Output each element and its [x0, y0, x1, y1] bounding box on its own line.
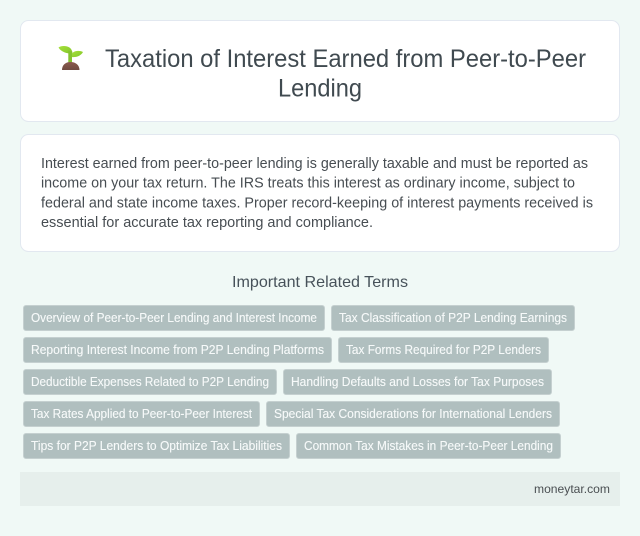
tag: Special Tax Considerations for International Lenders	[274, 407, 552, 421]
tag: Common Tax Mistakes in Peer-to-Peer Lending	[304, 439, 553, 453]
panel: title card	[20, 20, 620, 122]
tag: Reporting Interest Income from P2P Lending Platforms	[31, 343, 324, 357]
tag	[24, 306, 324, 330]
text block: description: Interest earned from peer-to-peer lending is generally taxable and must be reported as	[41, 156, 588, 172]
tag	[296, 434, 560, 458]
tag	[266, 402, 560, 426]
tag: Deductible Expenses Related to P2P Lending	[31, 375, 269, 389]
tag	[24, 338, 332, 362]
tag: Tax Classification of P2P Lending Earnings	[339, 311, 567, 325]
tag	[284, 370, 552, 394]
title: Lending	[278, 74, 362, 102]
tag	[338, 338, 548, 362]
heading: related terms: Important Related Terms	[232, 274, 408, 291]
text block: description	[41, 156, 593, 231]
tag	[24, 402, 260, 426]
text block: description: federal and state income taxes. Proper record-keeping of interest payments received is	[41, 196, 593, 212]
tag	[24, 434, 290, 458]
footer	[20, 472, 620, 506]
icon: seedling	[58, 46, 83, 70]
panel: related term tags	[24, 306, 574, 458]
title	[105, 45, 586, 102]
tag	[24, 370, 276, 394]
tag: Tips for P2P Lenders to Optimize Tax Liabilities	[31, 439, 282, 453]
text block: description: essential for accurate tax reporting and compliance.	[41, 215, 373, 231]
tag	[332, 306, 574, 330]
tag: Tax Rates Applied to Peer-to-Peer Interest	[31, 407, 252, 421]
panel: description	[20, 134, 620, 252]
tag: Handling Defaults and Losses for Tax Purposes	[291, 375, 544, 389]
tag: Tax Forms Required for P2P Lenders	[346, 343, 541, 357]
tag: Overview of Peer-to-Peer Lending and Interest Income	[31, 311, 317, 325]
title: Taxation of Interest Earned from Peer-to-Peer	[105, 45, 586, 73]
text block: description: income on your tax return. The IRS treats this interest as ordinary income, subject to	[41, 176, 575, 192]
footer source text: moneytar.com	[534, 482, 610, 496]
